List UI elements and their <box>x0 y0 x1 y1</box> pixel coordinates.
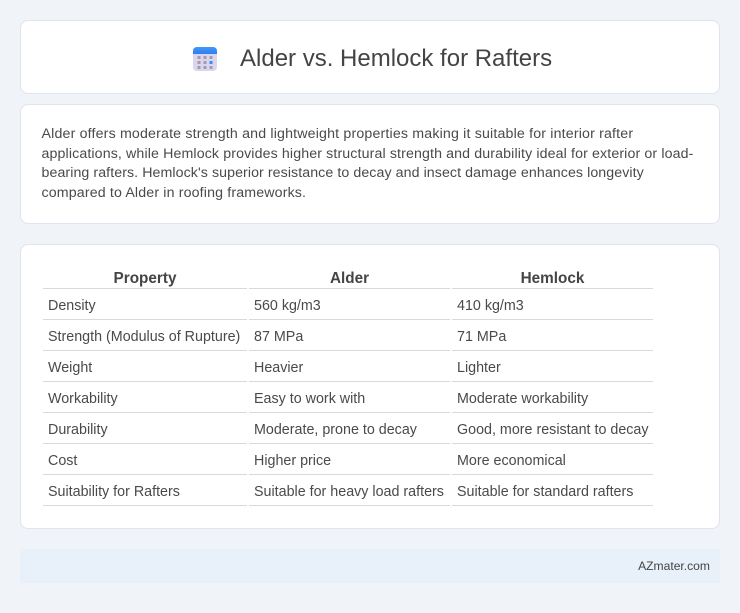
intro text: applications, while Hemlock provides higher structural strength and durability ideal for exterior or load- <box>42 146 694 162</box>
intro text <box>42 126 694 200</box>
table rows: Higher price <box>254 453 331 469</box>
table rows: More economical <box>457 453 566 469</box>
table rows: Lighter <box>457 360 501 376</box>
table rows: Density <box>48 298 96 314</box>
table heading row: Alder <box>330 270 369 287</box>
footer credit: AZmater.com <box>638 559 710 573</box>
panel: comparison table <box>20 244 720 529</box>
table rows: 71 MPa <box>457 329 506 345</box>
table rows: Easy to work with <box>254 391 365 407</box>
header card <box>20 20 720 94</box>
table rows: Moderate, prone to decay <box>254 422 417 438</box>
footer bar <box>20 549 720 583</box>
table rows: Weight <box>48 360 92 376</box>
intro text: bearing rafters. Hemlock's superior resistance to decay and insect damage enhances longevity <box>42 165 644 181</box>
table heading row <box>114 270 584 287</box>
table rows: 410 kg/m3 <box>457 298 524 314</box>
intro panel <box>20 104 720 224</box>
intro text: Alder offers moderate strength and lightweight properties making it suitable for interior rafter <box>42 126 633 142</box>
table rows: Durability <box>48 422 108 438</box>
table rows: Strength (Modulus of Rupture) <box>48 329 240 345</box>
table rows: Workability <box>48 391 118 407</box>
table rows: Suitable for heavy load rafters <box>254 484 444 500</box>
table rows <box>43 288 653 506</box>
table rows: Good, more resistant to decay <box>457 422 649 438</box>
icon: calendar <box>193 47 217 71</box>
title: Alder vs. Hemlock for Rafters <box>240 45 552 72</box>
table rows: Suitable for standard rafters <box>457 484 633 500</box>
table rows: Cost <box>48 453 77 469</box>
intro text: compared to Alder in roofing frameworks. <box>42 184 306 200</box>
table rows: Heavier <box>254 360 303 376</box>
table rows: 560 kg/m3 <box>254 298 321 314</box>
table rows: Suitability for Rafters <box>48 484 180 500</box>
table heading row: Hemlock <box>521 270 584 287</box>
table rows: 87 MPa <box>254 329 303 345</box>
table rows: Moderate workability <box>457 391 588 407</box>
table heading row: Property <box>114 270 176 287</box>
